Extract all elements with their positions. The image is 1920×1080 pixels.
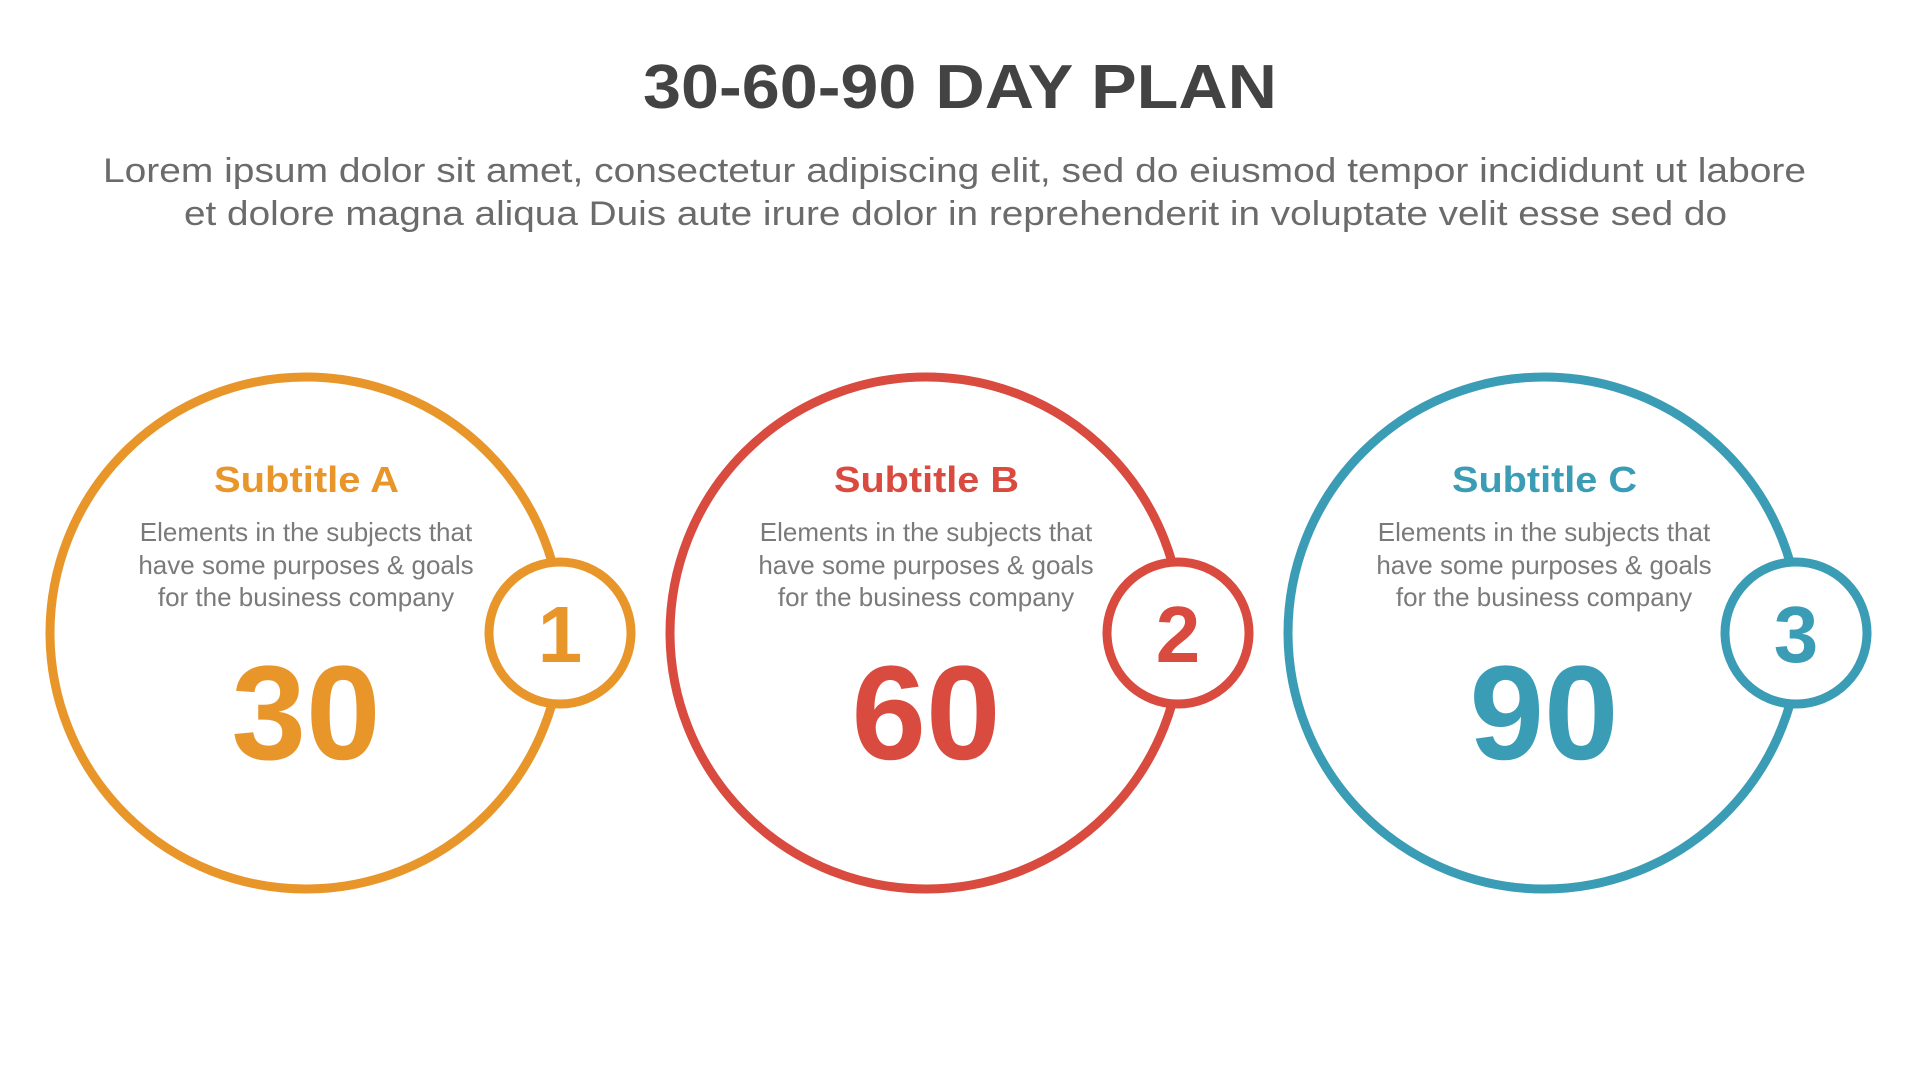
number 60: 60 xyxy=(851,639,1001,788)
subtitle C: Subtitle C xyxy=(1452,459,1637,500)
subtitle A: Subtitle A xyxy=(214,459,399,500)
subtitle B: Subtitle B xyxy=(834,459,1019,500)
body text B: have some purposes & goals xyxy=(758,550,1094,580)
body text C: for the business company xyxy=(1396,582,1692,612)
body text C xyxy=(1376,517,1712,612)
body text A: Elements in the subjects that xyxy=(140,517,473,547)
body text A: for the business company xyxy=(158,582,454,612)
number 30: 30 xyxy=(231,639,381,788)
body text A: have some purposes & goals xyxy=(138,550,474,580)
badge 1: 1 xyxy=(538,590,582,679)
body text C: have some purposes & goals xyxy=(1376,550,1712,580)
number 90: 90 xyxy=(1469,639,1619,788)
body text B: for the business company xyxy=(778,582,1074,612)
body text B: Elements in the subjects that xyxy=(760,517,1093,547)
title: 30-60-90 DAY PLAN xyxy=(643,53,1277,122)
badge 3: 3 xyxy=(1774,590,1818,679)
badge 2 xyxy=(1107,562,1249,704)
panel: 90 days xyxy=(1288,377,1867,889)
badge 3 xyxy=(1725,562,1867,704)
body text B xyxy=(758,517,1094,612)
badge 1 xyxy=(489,562,631,704)
description text: Lorem ipsum dolor sit amet, consectetur adipiscing elit, sed do eiusmod tempor incididunt ut labore xyxy=(103,152,1806,190)
panel: 60 days xyxy=(670,377,1249,889)
description text xyxy=(103,152,1806,233)
body text A xyxy=(138,517,474,612)
description text: et dolore magna aliqua Duis aute irure dolor in reprehenderit in voluptate velit esse sed do xyxy=(184,195,1727,233)
body text C: Elements in the subjects that xyxy=(1378,517,1711,547)
panel: 30 days xyxy=(50,377,631,889)
badge 2: 2 xyxy=(1156,590,1200,679)
